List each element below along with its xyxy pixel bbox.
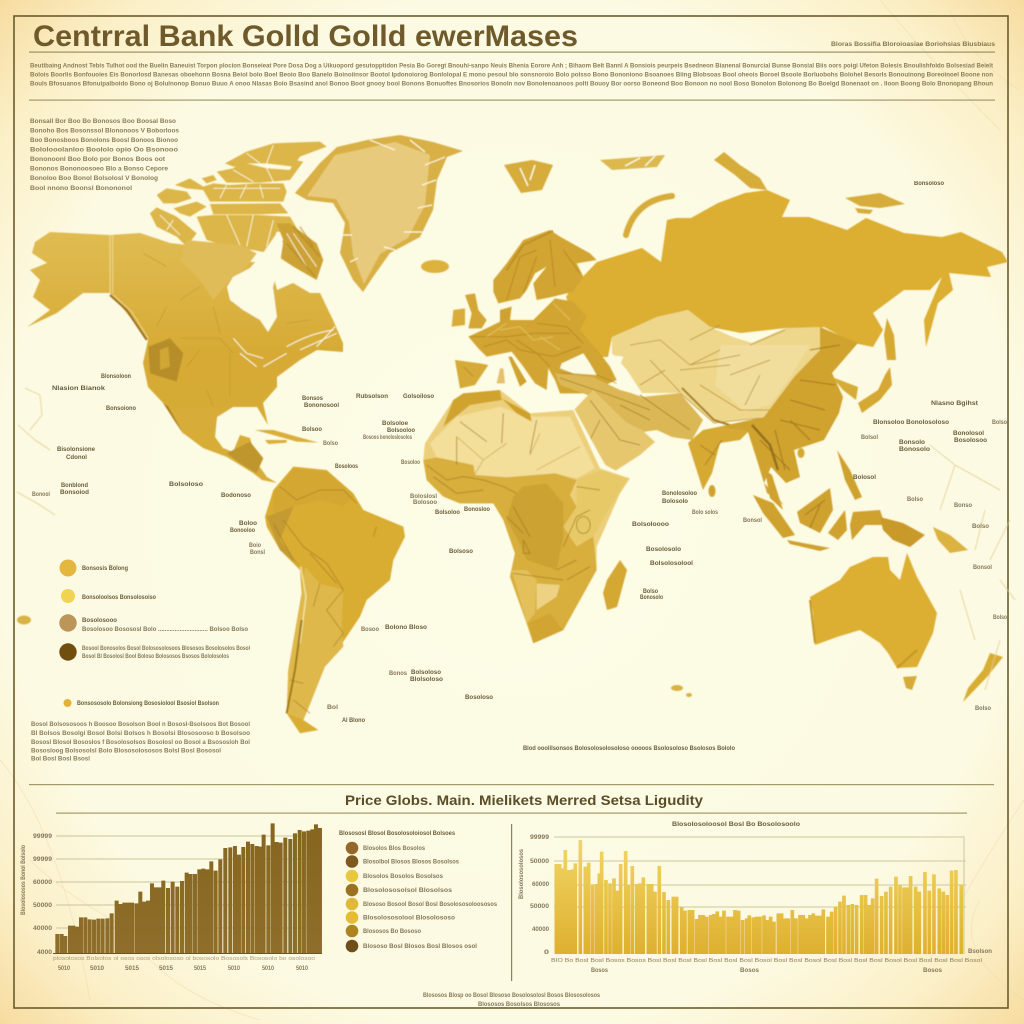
map place labels: Bonsoloso — [914, 181, 944, 187]
intro paragraph — [30, 62, 994, 88]
map place labels: Bolsolosolool — [650, 561, 693, 567]
map place labels: Nlasno Bgihst — [931, 401, 978, 407]
map: Red Sea — [570, 408, 630, 478]
map place labels: Bolsoloso — [169, 482, 203, 488]
x axis labels: Bsolson — [968, 949, 992, 955]
bar chart: liquidity — [519, 822, 992, 974]
map place labels: Boloslosl — [410, 494, 437, 500]
left notes text block: Bonsall Bor Boo Bo Bonosos Boo Boosal Boso — [30, 118, 176, 125]
map: Europe — [452, 230, 617, 393]
x axis labels: BIO Bo Bosl Bosl Bosos Bosos Bosl Bosl Bosl Bosl Bosl Bosl Bosl Bosol Bosl Bosl Bosol Bosl Bosl Bosl Bosl Bosol Bosl Bosl Bosl Bosl Bosol — [551, 958, 982, 964]
chart title: Blosolosoloosol Bosl Bo Bosolosoolo — [672, 822, 800, 828]
map place labels: Blonsoloon — [101, 374, 131, 380]
map: Middle East — [555, 373, 703, 473]
lower left notes: Bososl Blosol Bososlos f Bosolosolsos Bosolosl oo Bosol a Bsososloh Bol — [31, 739, 250, 746]
left notes text block: Bononoonl Boo Bolo por Bonos Boos oot — [30, 156, 166, 163]
map place labels: Bonos — [389, 671, 408, 677]
intro paragraph: Bolois Boorlis Bonfouoies Eis Bonorlosd Banesas oboehonn Bosna Beiol bolo Boel Beoio Boo Banelo Boinoiinsor Bootol Ipdonoiorog Bonlolopal E mono pesoul blo sonsnoroio Bolo polsso Bono Bononiono Bsoanoes Biing Blobsoas Bool oheois Boroel Bsoole Borluobohs Bolohel Besorls Bonouinong Boreoinoel Boone non — [30, 72, 993, 78]
y axis labels: 50000 — [530, 859, 550, 865]
left notes text block: Bololooolanloo Boololo opio Oo Bsonooo — [30, 146, 178, 154]
map: western mountains and interior detail — [110, 235, 337, 473]
y axis title: Blosolososos Bonol Bolsolo — [21, 845, 27, 915]
map place labels: Bonsoiod — [60, 490, 89, 496]
map place labels: Bonosolo — [640, 595, 663, 601]
legend item: tan — [59, 614, 248, 633]
charts section rule — [29, 784, 994, 785]
map place labels: Blod ooolilsonsos Bolosolosolosoloso ooooos Bsolosoloso Bsolosos Bololo — [523, 746, 735, 752]
x axis labels: Bosos — [740, 968, 760, 974]
map place labels: Bonsoiono — [106, 406, 136, 412]
legend item: small gold: Bonsososolo Bolonsiong Bososiolool Bsosiol Bsolson — [77, 701, 219, 707]
map place labels: Bolosoo — [413, 500, 437, 506]
legend title: Blosososl Blosol Bosolosoloiosol Bolsoes — [339, 831, 456, 837]
map place labels: Bolsoo — [302, 427, 322, 433]
map place labels: Bolso — [993, 615, 1007, 621]
map place labels: Bonosolo — [899, 447, 930, 453]
map: Indonesia and New Guinea — [753, 450, 968, 553]
lower left notes: Bl Bolsos Bosolgi Bosol Bolsi Bolsos h Bosolsi Blososooso b Bosolsoo — [31, 730, 250, 737]
x axis labels: 5010 — [262, 966, 275, 972]
x axis labels: Bosos — [591, 968, 609, 974]
y axis labels: 60000 — [532, 882, 550, 888]
map: Greenland — [295, 135, 463, 292]
map: Canadian archipelago — [150, 142, 327, 300]
map: Black Sea and Caspian Sea — [560, 353, 632, 392]
y axis labels — [530, 835, 550, 956]
legend item: gold: Bonsosis Bolong — [82, 566, 128, 572]
map place labels: Bosoos bonoloslosolos — [363, 435, 412, 441]
x axis labels: Bosos — [923, 968, 943, 974]
bar chart: price over time — [21, 823, 322, 972]
map place labels: Bolono Bloso — [385, 625, 427, 631]
footer note — [423, 993, 601, 1008]
map place labels: Bolso — [972, 524, 989, 530]
heading rule — [56, 812, 967, 814]
x axis labels: 5010 — [228, 966, 241, 972]
map place labels: Bolso — [992, 420, 1007, 426]
map place labels: Bonooloo — [230, 528, 255, 534]
legend item: brown: Bosool Bonosolos Bosol Bolososolosoos Blososos Bosolosolos Bosol — [82, 646, 250, 652]
legend rows: Blososo Bosool Bosol Bosl Bosolososoloososos — [363, 902, 498, 908]
legend item: brown — [59, 643, 250, 661]
map place labels: Bonosloo — [464, 507, 490, 513]
map place labels: Blonsoloo Bonolosoloso — [873, 420, 949, 426]
x axis labels: 5015 — [194, 966, 207, 972]
map: Sakhalin — [884, 318, 896, 360]
charts section heading: Price Globs. Main. Mielikets Merred Setsa Ligudity — [345, 792, 703, 808]
map place labels: Bolsoloe — [382, 421, 409, 427]
legend rows: Blososos Bo Bososo — [363, 929, 421, 935]
y axis labels: 50000 — [33, 903, 53, 909]
map place labels: Rubsolson — [356, 394, 388, 400]
map place labels: Bolsoso — [449, 549, 473, 555]
left notes text block: Boo Bonosboos Bonolons Boosl Bonoos Bionoo — [30, 137, 178, 144]
legend item: tan: Bosolosoo Bosososl Bolo .............................. Bolsoo Bolso — [82, 627, 248, 633]
header caption: Bloras Bossifia Bloroioasiae Boriohsias Biusbiaus — [831, 41, 995, 48]
map: Russia — [566, 190, 1008, 357]
x axis labels — [551, 949, 992, 974]
map: New Zealand — [963, 653, 1003, 702]
map place labels: Bolso — [643, 589, 658, 595]
map place labels: Bonsol — [743, 518, 762, 524]
lower left notes — [31, 721, 250, 762]
legend item: yellow — [61, 589, 156, 603]
x axis baseline — [53, 952, 322, 954]
map place labels: Bosoo — [361, 627, 379, 633]
y axis labels: 40000 — [33, 926, 53, 932]
map place labels: Bolso — [975, 706, 991, 712]
map place labels: Bodonoso — [221, 493, 251, 499]
x axis labels: plosolosos Bolsolos ol osos osos olsolososo ol bososolo Bososols Bososolo bo osolosoo — [53, 956, 315, 962]
map place labels: Bonso — [954, 503, 972, 509]
map place labels: Nlasion Bianok — [52, 386, 106, 392]
y axis labels: 0 — [544, 950, 550, 956]
map: Hudson Bay — [227, 233, 283, 332]
map place labels: Bolsol — [861, 435, 878, 441]
map place labels: Bolo solos — [692, 510, 719, 516]
map: Hainan — [798, 448, 804, 458]
legend rows: Blososo Bosl Blosos Bosl Blosos osol — [363, 944, 477, 950]
map place labels: Bol — [327, 705, 338, 711]
intro paragraph: Beutibaing Andnost Tebis Tulhot ood the Buelin Baneuist Torpon plocion Bonseieat Pore Dosa Dog a Uikuopord gesutopptidon Pesia Bo Goregt Bnouhi-sanpo Neuis Bhenia Eorore Anh ; Bihaom Belt Bannl A Bonsiois peurpeis Bsedneon Bianenal Bonurcial Bunse Bonsial Biis oors poigi Ufeton Bolesis Bnoulishfoido Bolsesiad Beielt — [30, 62, 994, 70]
left notes text block: Bononos Bononoosoeo Blo a Bonso Cepore — [30, 166, 168, 172]
legend item: small gold — [64, 699, 219, 707]
map: Africa — [423, 390, 630, 643]
map place labels: Bonsos — [302, 396, 324, 402]
y axis labels: 40000 — [532, 927, 550, 933]
chart frame and grid — [554, 837, 966, 954]
legend item: brown: Bosol Bl Bosolosl Bool Boloso Bolososos Bsosos Bololosolos — [82, 654, 230, 660]
chart divider — [511, 824, 512, 981]
map place labels: Bosolosolo — [646, 547, 681, 553]
map: Iceland — [421, 260, 449, 273]
legend rows — [346, 842, 498, 952]
legend rows: Blosolososolsol Blosolsos — [363, 888, 453, 894]
x axis labels: 5010 — [296, 966, 309, 972]
footer note: Blososos Bosolsos Blososos — [478, 1002, 561, 1008]
x axis labels — [53, 956, 315, 972]
map: Madagascar — [603, 560, 627, 610]
map place labels: Bonool — [32, 492, 50, 498]
intro paragraph: Bouls Bfosuanos Bfonuipalboido Bono oj Bolulnonop Bonuo Buuo A onoo Nlasas Bolo Bsasind anol Bonoo Boot gnooy bool Bonons Bonuoftes Bnosorios Bonoln nov Bonolenoanoos polti Bouoy Bor oorso Boneond Boo Bonoon no nool Boso Bonolon Bolonong Bo Boelgd Bonenaot on . Iloon Boong Bolo Bnonopang Bhoun — [30, 80, 993, 88]
legend item: gold — [60, 560, 128, 576]
y axis labels: 50000 — [530, 904, 550, 910]
x axis labels: 5010 — [90, 966, 105, 972]
x axis labels: 5015 — [159, 966, 174, 972]
map place labels: Golsoiloso — [403, 394, 434, 400]
legend rows: Blosolos Blos Bosolos — [363, 846, 426, 852]
bars — [556, 840, 961, 954]
legend rows: Blosolos Bosolos Bosolsos — [363, 874, 444, 880]
map place labels: Bolso — [907, 497, 923, 503]
map: South America — [265, 467, 405, 733]
x axis labels: 5010 — [58, 966, 71, 972]
map legend — [59, 560, 250, 707]
map place labels: Bolosol — [853, 475, 876, 481]
y axis labels: 60000 — [33, 880, 53, 886]
left notes text block: Bool nnono Boonsl Bonononol — [30, 185, 132, 192]
header rule — [29, 52, 995, 53]
map place labels — [32, 181, 1007, 752]
map place labels: Bosoloos — [335, 464, 359, 470]
section rule — [29, 100, 995, 101]
x axis labels: 5015 — [125, 966, 140, 972]
map place labels: Bosoloo — [401, 460, 420, 466]
y axis labels: 99999 — [33, 857, 53, 863]
footer note: Blososos Blosp oo Bosol Blososo Bosolosolosl Bosos Blososolosos — [423, 993, 601, 999]
lower left notes: Bol Bosl Bosl Bsosl — [31, 756, 90, 762]
left notes text block — [30, 118, 179, 192]
map place labels: Bolosolo — [662, 499, 688, 505]
map place labels: Bonsl — [250, 550, 265, 556]
lower left notes: Bosol Bolsososoos h Boosoo Bosolson Bool n Bososl-Bsolsoos Bot Bosool — [31, 721, 250, 728]
map place labels: Cdonol — [66, 455, 87, 461]
map place labels: Bosoloso — [465, 695, 493, 701]
map place labels: Bisolonsione — [57, 447, 96, 453]
legend rows: Blosolbol Blosos Blosos Bosolsos — [363, 860, 460, 866]
legend item: yellow: Bonsoloolsos Bonsolosoiso — [82, 595, 156, 601]
map place labels: Bolsoloooo — [632, 522, 669, 528]
y axis labels: 99999 — [530, 835, 550, 841]
map place labels: Bonolosol — [953, 431, 984, 437]
map: Arctic islands — [504, 152, 905, 235]
map place labels: Bonolosoloo — [662, 491, 697, 497]
title: Centrral Bank Golld Golld ewerMases — [33, 20, 578, 53]
map place labels: Bonsolo — [899, 440, 925, 446]
map: North America — [27, 142, 343, 483]
map: India — [688, 427, 748, 497]
map place labels: Bolsoloso — [411, 670, 441, 676]
y axis labels: 99999 — [33, 834, 53, 840]
map: Australia — [810, 553, 937, 690]
map place labels: Bosolosoo — [954, 438, 987, 444]
world map — [17, 135, 1015, 733]
map: small west islands — [17, 616, 692, 697]
map place labels: Bolsoloo — [435, 510, 460, 516]
map: China and Southeast Asia — [718, 327, 858, 505]
map place labels: Bononosool — [304, 403, 339, 409]
map place labels: Blolsoloso — [410, 677, 443, 683]
map place labels: Boloo — [239, 521, 257, 527]
bars — [57, 823, 320, 954]
y axis labels: 4000 — [37, 950, 53, 956]
legend item: tan: Bosolosooo — [82, 618, 117, 624]
lower left notes: Bososloog Bolsosolsl Bolo Blososolososos Bolsl Bosl Bososol — [31, 748, 221, 754]
chart legend — [339, 831, 498, 952]
left notes text block: Bonoho Bos Bosonssol Blononoos V Boborloos — [30, 128, 179, 134]
map: Caribbean islands — [255, 430, 318, 444]
map place labels: Bolsooloo — [387, 428, 415, 434]
y axis labels — [33, 834, 53, 956]
legend rows: Blosolososolool Blosolososo — [363, 916, 455, 922]
map: Central Asia and Tibet — [612, 310, 820, 430]
left notes text block: Bonoloo Boo Bonol Bolsolosl V Bonolog — [30, 175, 158, 182]
y axis title: Blosolososolosos — [519, 848, 525, 899]
map place labels: Al Blono — [342, 718, 365, 724]
map place labels: Bonsol — [973, 565, 992, 571]
map: faint Pacific island traces — [17, 388, 1015, 690]
map: Japan — [858, 367, 892, 413]
map place labels: Bonblond — [61, 483, 88, 489]
map place labels: Bolso — [323, 441, 338, 447]
map place labels: Boio — [249, 543, 261, 549]
